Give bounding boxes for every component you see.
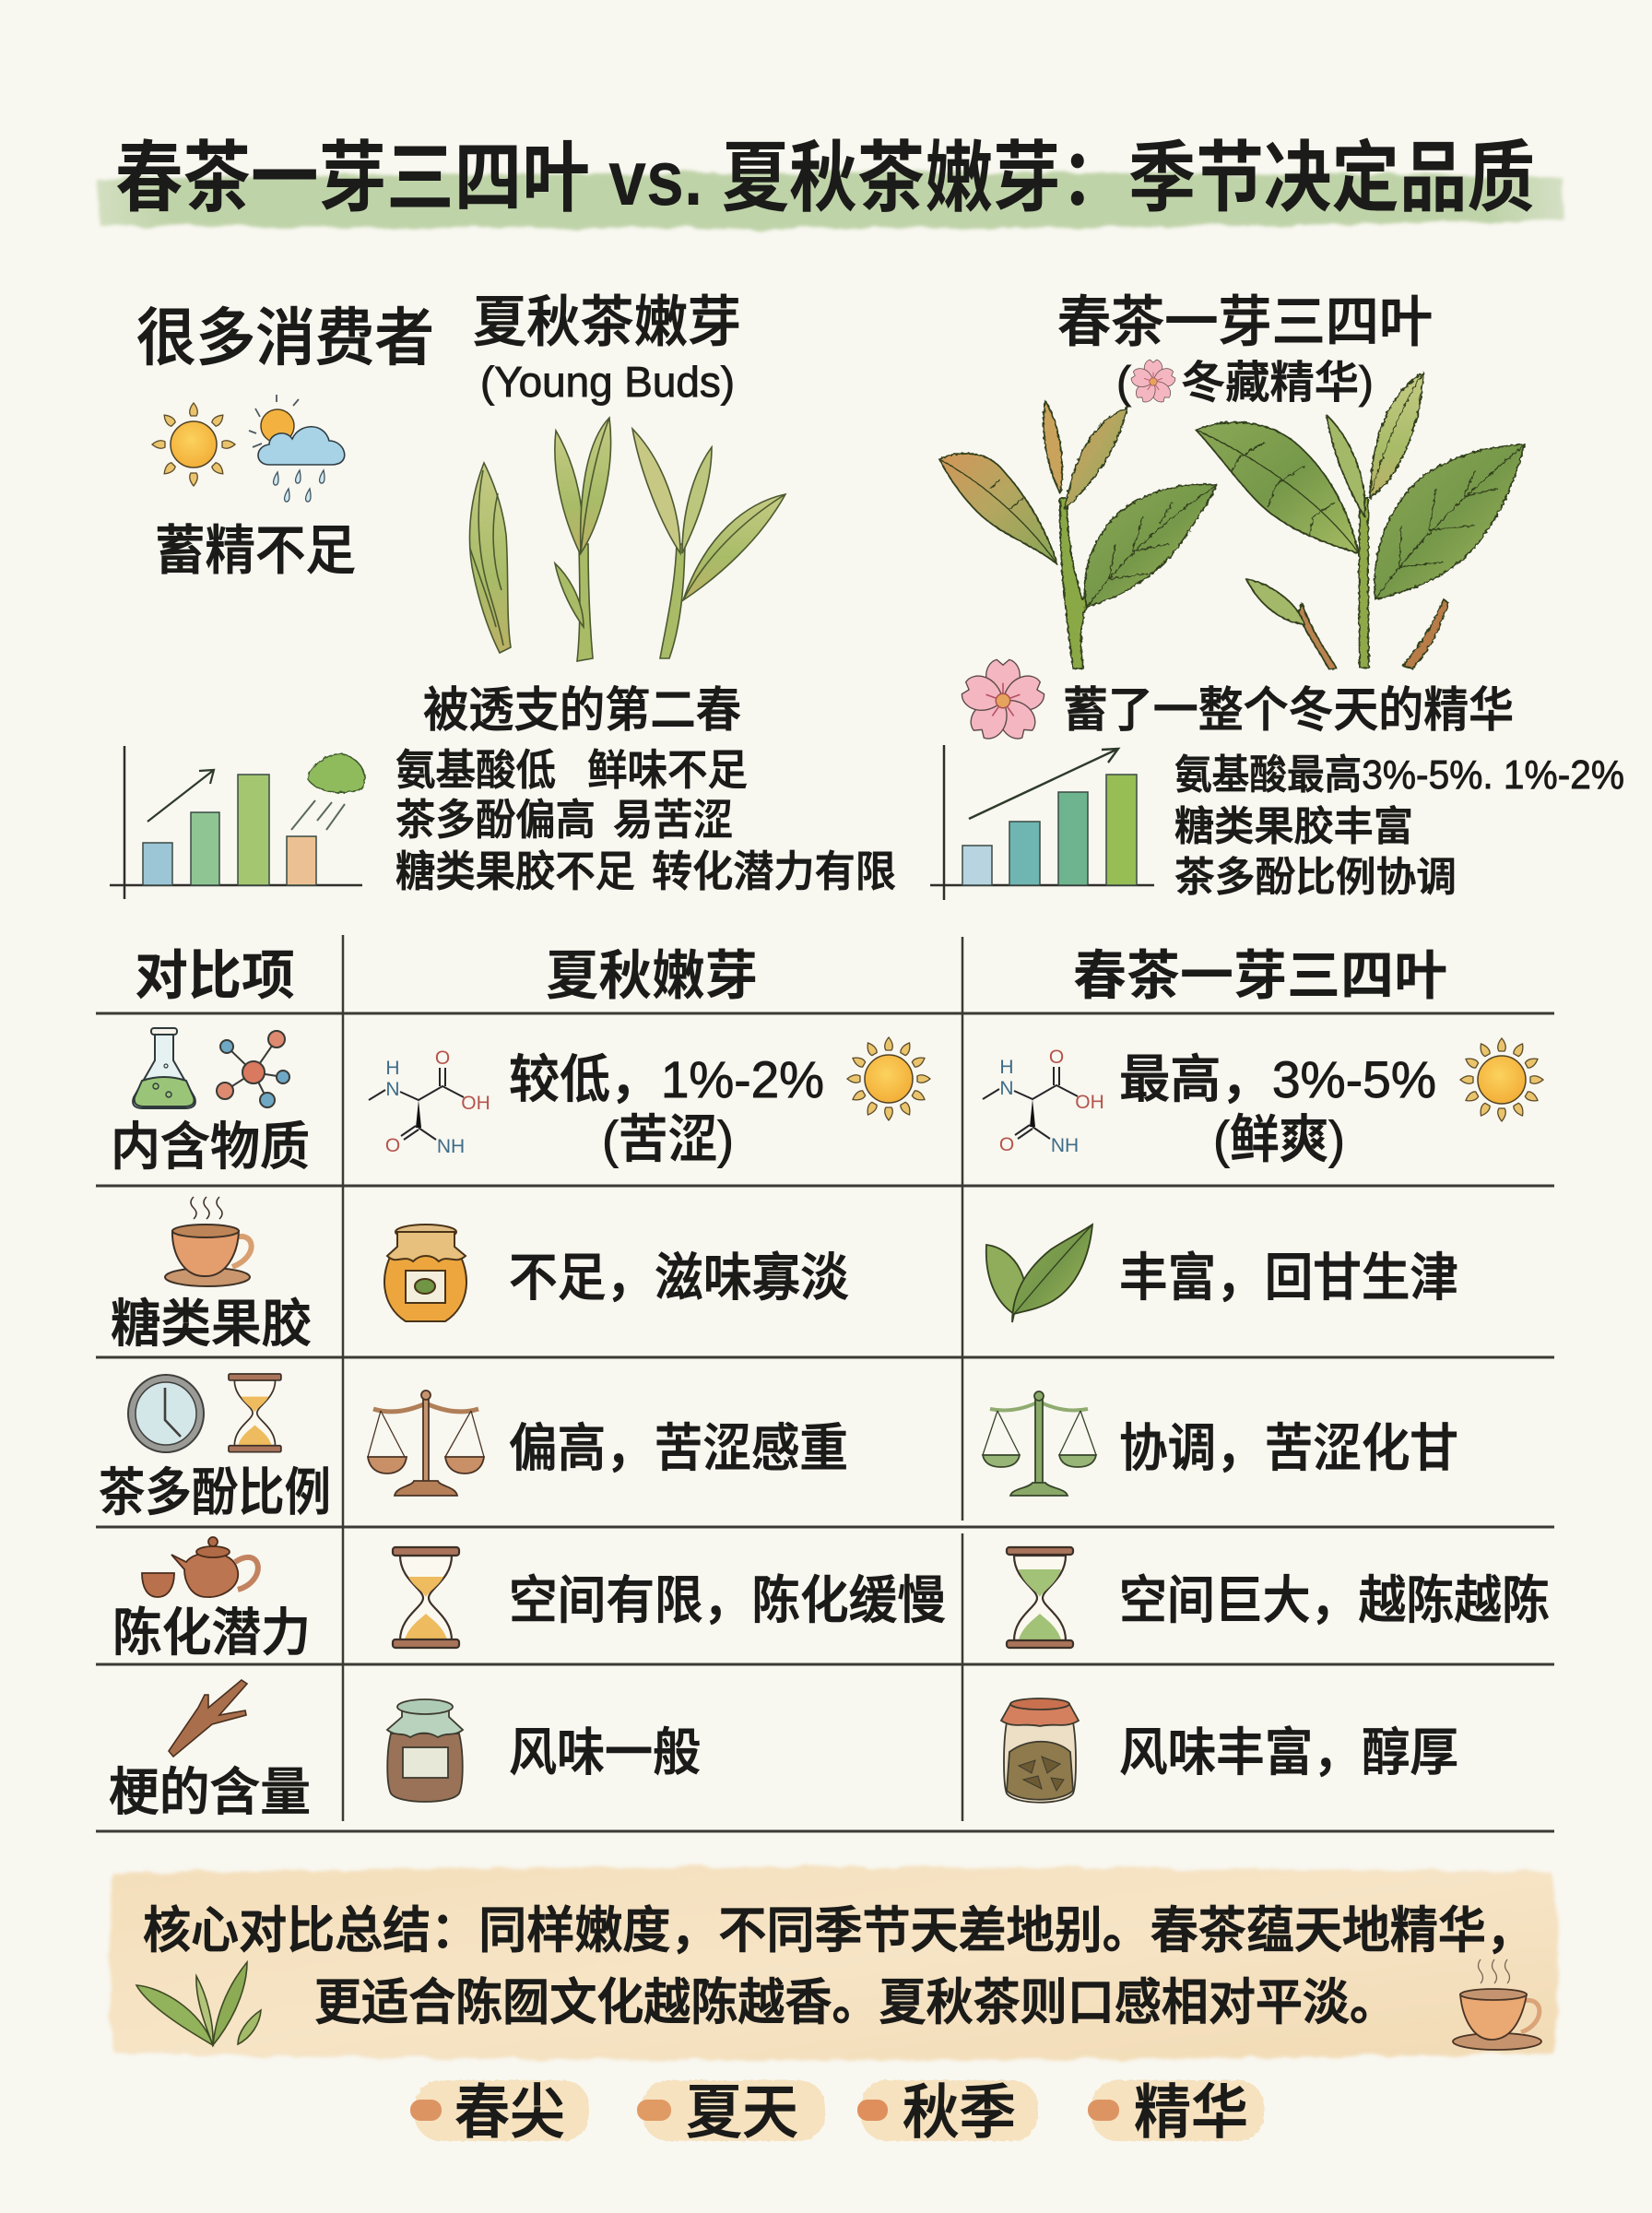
icon: sun: [152, 403, 235, 486]
row: sugars: [111, 1197, 1458, 1353]
icon: tea sprig: [136, 1962, 261, 2045]
icon: tea jar red lid: [1001, 1698, 1079, 1803]
icon: teapot and cup: [142, 1537, 258, 1597]
list: buds properties: [395, 746, 896, 895]
illustration: bud three: [632, 429, 785, 658]
list: buds properties: 转化潜力有限: [652, 847, 896, 895]
caption: second spring: 被透支的第二春: [423, 684, 741, 738]
row: polyphenols: [99, 1374, 1458, 1521]
label: aging potential: 陈化潜力: [112, 1604, 311, 1662]
label: sugars: 糖类果胶: [111, 1295, 312, 1353]
icon: sun: [847, 1037, 930, 1120]
value note: bitter: (苦涩): [602, 1110, 734, 1168]
icon: hourglass amber: [393, 1547, 459, 1648]
illustration: left tea shoot: [939, 401, 1217, 669]
row: stem content: [109, 1680, 1458, 1821]
illustration: bud one: [469, 463, 511, 653]
illustration: right tea shoot: [1196, 373, 1525, 669]
heading: summer autumn buds: 夏秋茶嫩芽: [473, 291, 741, 353]
icon: steaming cup: [165, 1197, 252, 1286]
value: buds stem: 风味一般: [509, 1723, 701, 1781]
subheading: winter essence: 冬藏精华): [1181, 359, 1374, 408]
icon: amino acid formula right: [983, 1047, 1104, 1156]
value: spring amino: 最高，3%-5%: [1119, 1050, 1436, 1108]
label: polyphenol ratio: 茶多酚比例: [99, 1463, 331, 1521]
value: buds aging: 空间有限，陈化缓慢: [509, 1571, 946, 1629]
illustration: bud two: [555, 418, 611, 661]
icon: cherry blossom: [959, 659, 1047, 744]
value: spring aging: 空间巨大，越陈越陈: [1119, 1571, 1550, 1629]
icon: green leaf pair: [986, 1225, 1092, 1322]
summary background: [107, 1867, 1558, 2060]
row: aging potential: [112, 1537, 1550, 1662]
list: spring properties: 茶多酚比例协调: [1174, 855, 1457, 900]
list: spring properties: [1174, 752, 1624, 900]
icon: brown scale: [368, 1391, 484, 1496]
tag: summer: [637, 2079, 825, 2146]
icon: green scale: [983, 1391, 1096, 1496]
table grid: [96, 935, 1554, 1831]
value: spring polyphenols: 协调，苦涩化甘: [1119, 1419, 1458, 1477]
value: buds sugars: 不足，滋味寡淡: [509, 1249, 849, 1307]
tag: summer: 夏天: [686, 2079, 798, 2146]
icon: amino acid formula: [369, 1047, 490, 1157]
list: buds properties: 鲜味不足: [587, 746, 748, 794]
tags: [410, 2079, 1264, 2146]
icon: sun right: [1460, 1038, 1543, 1121]
summary line two: 更适合陈囫文化越陈越香。夏秋茶则口感相对平淡。: [314, 1975, 1397, 2030]
list: spring properties: 糖类果胶丰富: [1174, 804, 1413, 849]
tag: autumn: 秋季: [903, 2079, 1016, 2146]
table header: 夏秋嫩芽: [546, 946, 758, 1006]
table header: 春茶一芽三四叶: [1073, 946, 1447, 1006]
panel: young buds: [110, 291, 896, 899]
panel: consumers note: [136, 303, 434, 581]
value: buds amino: 较低，1%-2%: [509, 1050, 824, 1108]
title brush stroke: [96, 172, 1564, 229]
tag: autumn: [857, 2079, 1038, 2146]
icon: rain cloud: [249, 395, 345, 502]
summary line one: 核心对比总结：同样嫩度，不同季节天差地别。春茶蕴天地精华，: [143, 1903, 1534, 1959]
list: spring properties: 氨基酸最高3%-5%. 1%-2%: [1174, 752, 1624, 798]
subheading: young buds: (Young Buds): [480, 358, 735, 406]
row: contents: [111, 1028, 1543, 1176]
value: spring stem: 风味丰富，醇厚: [1119, 1723, 1458, 1781]
list: buds properties: 氨基酸低: [395, 746, 556, 794]
tag: essence: [1088, 2079, 1264, 2146]
tag: essence: 精华: [1134, 2079, 1248, 2146]
text: insufficient essence: 蓄精不足: [155, 521, 356, 581]
chart: buds bars: [110, 746, 365, 899]
subheading: winter essence: (: [1116, 359, 1131, 408]
icon: flask: [133, 1028, 195, 1108]
value note: fresh: (鲜爽): [1213, 1110, 1345, 1168]
icon: honey jar: [384, 1225, 466, 1321]
panel: spring tea: [930, 291, 1624, 900]
value: buds polyphenols: 偏高，苦涩感重: [509, 1419, 848, 1477]
tag: spring tips: 春尖: [454, 2079, 565, 2146]
list: buds properties: 茶多酚偏高: [395, 796, 596, 844]
icon: twig: [169, 1680, 247, 1757]
title banner: [96, 135, 1564, 229]
panel: comparison table: [96, 935, 1554, 1831]
icon: tea jar green lid: [387, 1699, 463, 1802]
icon: hourglass green: [1007, 1547, 1073, 1648]
list: buds properties: 易苦涩: [613, 796, 733, 844]
label: contents: 内含物质: [111, 1118, 310, 1176]
label: stem content: 梗的含量: [109, 1763, 311, 1821]
table header: 对比项: [135, 946, 295, 1006]
heading: spring tea: 春茶一芽三四叶: [1057, 291, 1433, 353]
table header: [135, 946, 1447, 1006]
tag: spring tips: [410, 2079, 589, 2146]
chart: spring bars: [930, 745, 1154, 900]
icon: molecule network: [217, 1031, 289, 1107]
value: spring sugars: 丰富，回甘生津: [1119, 1249, 1458, 1307]
icon: clock: [128, 1375, 204, 1452]
heading: consumers: 很多消费者: [136, 303, 434, 373]
panel: core summary: [107, 1867, 1558, 2060]
icon: summary teacup: [1453, 1959, 1541, 2050]
list: buds properties: 糖类果胶不足: [395, 847, 635, 895]
caption: winter essence stored: 蓄了一整个冬天的精华: [1063, 684, 1514, 738]
icon: hourglass small: [229, 1374, 281, 1452]
